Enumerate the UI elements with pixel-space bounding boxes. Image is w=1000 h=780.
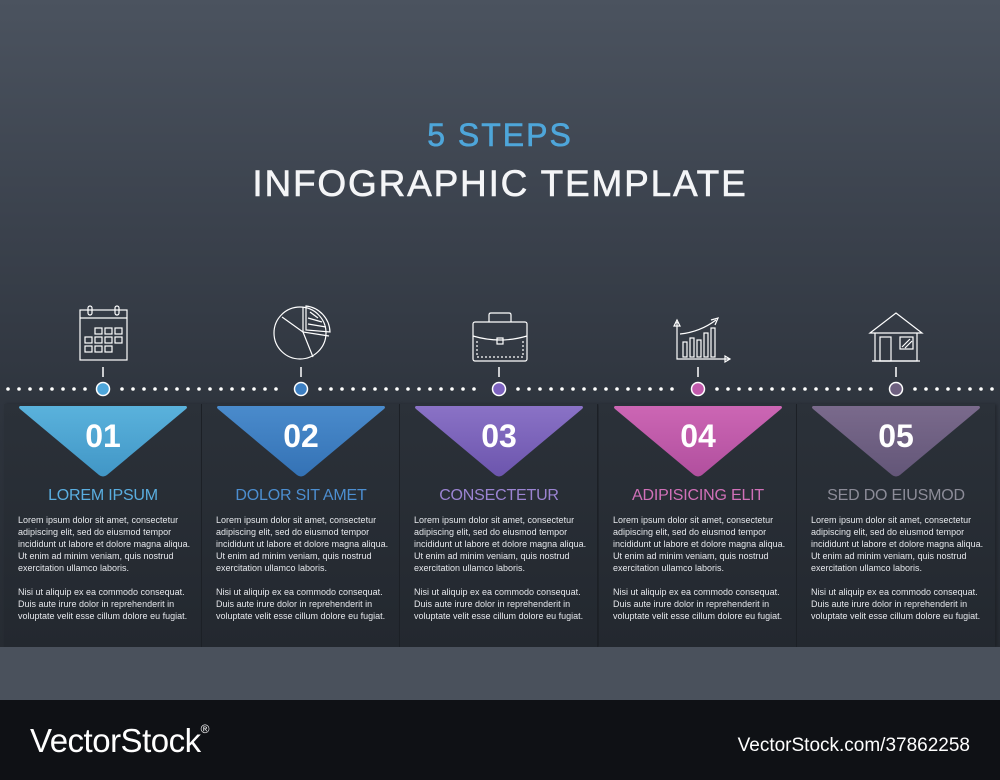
title	[252, 117, 748, 204]
text 1: Nisi ut aliquip ex ea commodo consequat.	[18, 587, 185, 597]
text 1: Lorem ipsum dolor sit amet, consectetur	[18, 515, 178, 525]
text 4: Lorem ipsum dolor sit amet, consectetur	[613, 515, 773, 525]
text 5	[811, 515, 983, 621]
number 01: 01	[85, 418, 121, 454]
step 2	[216, 418, 388, 621]
text 4: Ut enim ad minim veniam, quis nostrud	[613, 551, 769, 561]
text 5: Duis aute irure dolor in reprehenderit in	[811, 599, 967, 609]
text 2: Ut enim ad minim veniam, quis nostrud	[216, 551, 372, 561]
text 5: adipiscing elit, sed do eiusmod tempor	[811, 527, 964, 537]
text 4: adipiscing elit, sed do eiusmod tempor	[613, 527, 766, 537]
text 4	[613, 515, 785, 621]
step 5	[811, 418, 983, 621]
heading 5: SED DO EIUSMOD	[827, 487, 965, 504]
text 5: incididunt ut labore et dolore magna aliqua.	[811, 539, 983, 549]
title line 1: 5 STEPS	[427, 117, 573, 153]
text 1: exercitation ullamco laboris.	[18, 563, 129, 573]
text 2: exercitation ullamco laboris.	[216, 563, 327, 573]
number 02: 02	[283, 418, 319, 454]
icon: growth chart	[674, 318, 730, 362]
text 2	[216, 515, 388, 621]
text 2: Lorem ipsum dolor sit amet, consectetur	[216, 515, 376, 525]
heading 2: DOLOR SIT AMET	[235, 487, 367, 504]
text 1	[18, 515, 190, 621]
text 5: exercitation ullamco laboris.	[811, 563, 922, 573]
title line 2: INFOGRAPHIC TEMPLATE	[252, 163, 748, 204]
heading 1: LOREM IPSUM	[48, 487, 158, 504]
icon: briefcase	[473, 313, 527, 361]
text 2: incididunt ut labore et dolore magna aliqua.	[216, 539, 388, 549]
text 5: voluptate velit esse cillum dolore eu fugiat.	[811, 611, 980, 621]
text 5: Nisi ut aliquip ex ea commodo consequat.	[811, 587, 978, 597]
text 4: exercitation ullamco laboris.	[613, 563, 724, 573]
step markers	[96, 367, 902, 396]
text 2: voluptate velit esse cillum dolore eu fugiat.	[216, 611, 385, 621]
bottom band	[0, 647, 1000, 700]
footer id: VectorStock.com/37862258	[738, 735, 970, 756]
text 2: adipiscing elit, sed do eiusmod tempor	[216, 527, 369, 537]
text 4: incididunt ut labore et dolore magna aliqua.	[613, 539, 785, 549]
heading 3: CONSECTETUR	[439, 487, 559, 504]
icon: pie chart	[274, 306, 330, 359]
text 2: Duis aute irure dolor in reprehenderit in	[216, 599, 372, 609]
dotted timeline	[6, 387, 994, 391]
text 1: adipiscing elit, sed do eiusmod tempor	[18, 527, 171, 537]
text 5: Ut enim ad minim veniam, quis nostrud	[811, 551, 967, 561]
text 4: Duis aute irure dolor in reprehenderit in	[613, 599, 769, 609]
text 1: Ut enim ad minim veniam, quis nostrud	[18, 551, 174, 561]
text 3: voluptate velit esse cillum dolore eu fugiat.	[414, 611, 583, 621]
text 1: Duis aute irure dolor in reprehenderit in	[18, 599, 174, 609]
text 3: Lorem ipsum dolor sit amet, consectetur	[414, 515, 574, 525]
triangles	[19, 406, 980, 476]
text 3: Ut enim ad minim veniam, quis nostrud	[414, 551, 570, 561]
text 3: Nisi ut aliquip ex ea commodo consequat.	[414, 587, 581, 597]
text 4: Nisi ut aliquip ex ea commodo consequat.	[613, 587, 780, 597]
text 3: adipiscing elit, sed do eiusmod tempor	[414, 527, 567, 537]
text 1: incididunt ut labore et dolore magna aliqua.	[18, 539, 190, 549]
heading 4: ADIPISICING ELIT	[632, 487, 764, 504]
text 3	[414, 515, 586, 621]
text 1: voluptate velit esse cillum dolore eu fugiat.	[18, 611, 187, 621]
step 3	[414, 418, 586, 621]
text 3: exercitation ullamco laboris.	[414, 563, 525, 573]
footer	[0, 700, 1000, 780]
text 3: incididunt ut labore et dolore magna aliqua.	[414, 539, 586, 549]
text 2: Nisi ut aliquip ex ea commodo consequat.	[216, 587, 383, 597]
text 4: voluptate velit esse cillum dolore eu fugiat.	[613, 611, 782, 621]
step 1	[18, 418, 190, 621]
number 04: 04	[680, 418, 716, 454]
number 03: 03	[481, 418, 517, 454]
step 4	[613, 418, 785, 621]
text 5: Lorem ipsum dolor sit amet, consectetur	[811, 515, 971, 525]
text 3: Duis aute irure dolor in reprehenderit in	[414, 599, 570, 609]
number 05: 05	[878, 418, 914, 454]
icon: calendar	[80, 306, 127, 360]
icon: house	[870, 313, 922, 361]
footer logo: VectorStock®	[30, 722, 209, 759]
